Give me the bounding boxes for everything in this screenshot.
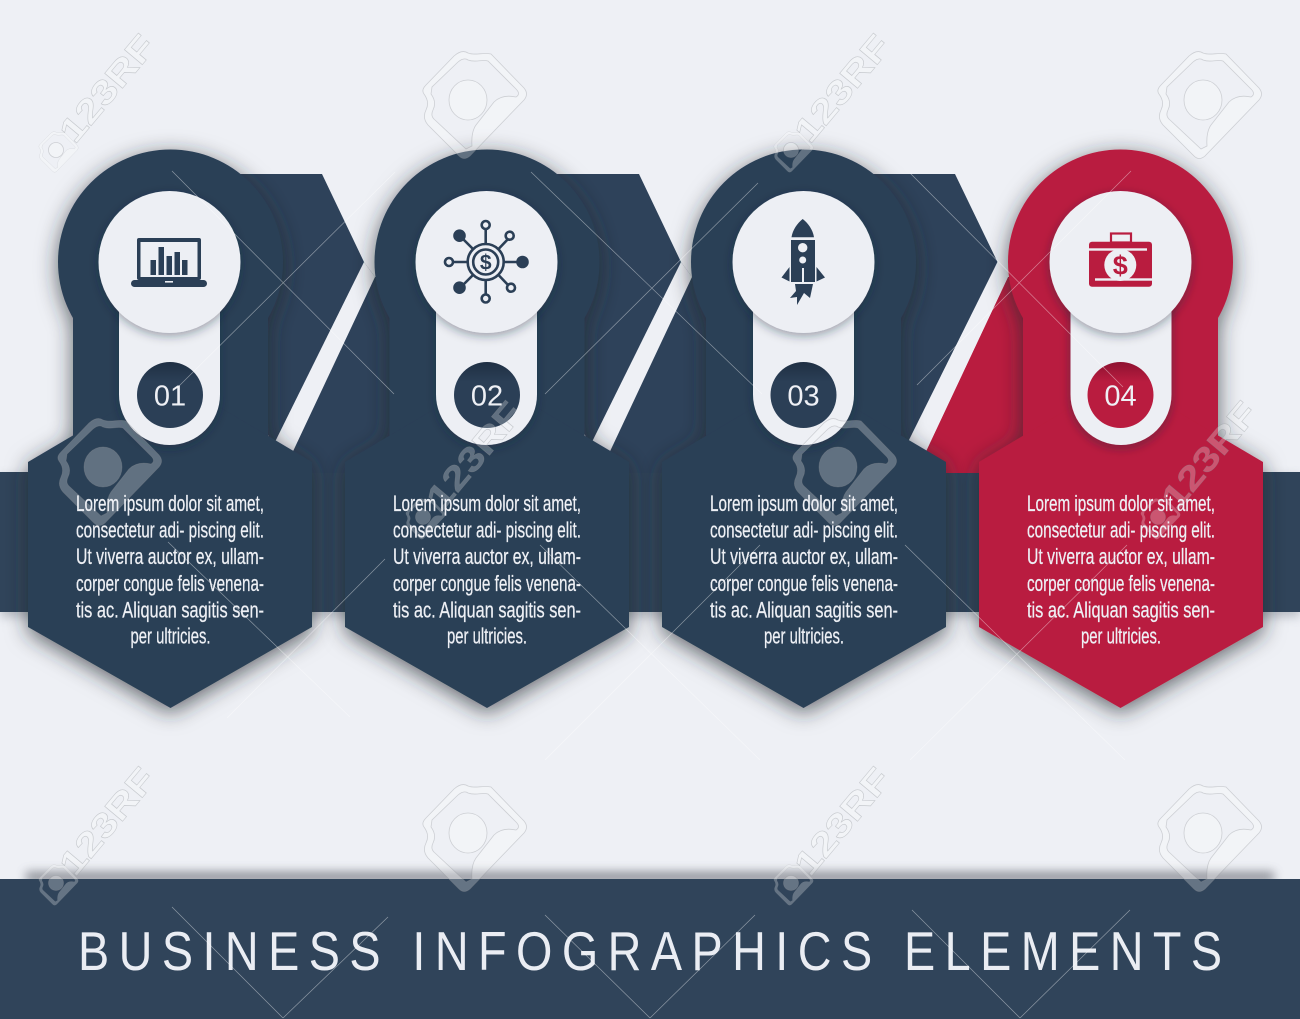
- step 1 description: Lorem ipsum dolor sit amet,: [76, 491, 264, 516]
- step 3 description: [710, 491, 898, 648]
- step 3 description: per ultricies.: [764, 624, 844, 648]
- step 2 silhouette: [345, 150, 629, 708]
- step 4 description: Ut viverra auctor ex, ullam-: [1027, 544, 1215, 569]
- step 2 pill: [436, 262, 537, 445]
- step 3 description: tis ac. Aliquan sagitis sen-: [710, 598, 898, 623]
- title band: [0, 872, 1300, 1019]
- step 2 description: per ultricies.: [447, 624, 527, 648]
- step 3 description: Ut viverra auctor ex, ullam-: [710, 544, 898, 569]
- step 2 description: Lorem ipsum dolor sit amet,: [393, 491, 581, 516]
- step 1 description: corper congue felis venena-: [76, 571, 264, 596]
- step 4 description: corper congue felis venena-: [1027, 571, 1215, 596]
- step 1 silhouette: [28, 150, 312, 708]
- step 4 icon circle: [1050, 191, 1192, 333]
- step 4 number badge: 04: [1104, 380, 1137, 412]
- step 3 silhouette: [662, 150, 946, 708]
- arrow connector 3 with red segment: [873, 174, 1040, 473]
- watermark diagonal hairlines: [168, 171, 1131, 1018]
- icon: briefcase with dollar: [1089, 234, 1152, 287]
- step 3 card: [662, 150, 946, 708]
- watermark stamps: 123RF: [1154, 395, 1265, 517]
- step 3 description: Lorem ipsum dolor sit amet,: [710, 491, 898, 516]
- step 2 number badge: 02: [471, 380, 503, 412]
- icon: dollar network: $: [480, 252, 492, 274]
- arrow connector 1: [240, 174, 400, 473]
- step 3 description: consectetur adi- piscing elit.: [710, 518, 898, 543]
- step 1 description: per ultricies.: [130, 624, 210, 648]
- step 4 pill: [1070, 262, 1172, 445]
- step 1 number badge: 01: [154, 380, 186, 412]
- step 2 card: [345, 150, 629, 708]
- horizontal ribbon behind the cards: [0, 472, 1300, 617]
- step 1 number badge: [137, 362, 203, 428]
- step 3 description: corper congue felis venena-: [710, 571, 898, 596]
- step 1 icon circle: [98, 191, 240, 333]
- title: BUSINESS INFOGRAPHICS ELEMENTS: [78, 920, 1222, 982]
- watermark stamps: 123RF: [787, 28, 898, 150]
- step 3 pill: [753, 262, 854, 445]
- step 2 number badge: [454, 362, 520, 428]
- step 4 number badge: [1088, 362, 1154, 428]
- watermark stamps: 123RF: [787, 761, 898, 883]
- step 2 description: [393, 491, 581, 648]
- step 3 number badge: [770, 362, 836, 428]
- step 1 pill: [119, 262, 220, 445]
- step 1 card: [28, 150, 312, 708]
- step 2 description: consectetur adi- piscing elit.: [393, 518, 581, 543]
- icon: laptop with bar chart: [131, 238, 207, 287]
- watermark stamps: 123RF: [419, 395, 530, 517]
- step 2 description: Ut viverra auctor ex, ullam-: [393, 544, 581, 569]
- step 4 description: Lorem ipsum dolor sit amet,: [1027, 491, 1215, 516]
- icon: dollar network: [445, 221, 528, 302]
- step 1 description: tis ac. Aliquan sagitis sen-: [76, 598, 264, 623]
- step 2 icon circle: [416, 191, 558, 333]
- step 2 description: tis ac. Aliquan sagitis sen-: [393, 598, 581, 623]
- step 3 icon circle: [732, 191, 874, 333]
- step 4 description: [1027, 491, 1215, 648]
- step 4 description: tis ac. Aliquan sagitis sen-: [1027, 598, 1215, 623]
- step 1 description: consectetur adi- piscing elit.: [76, 518, 264, 543]
- watermark stamps: 123RF: [52, 761, 163, 883]
- step 4 description: consectetur adi- piscing elit.: [1027, 518, 1215, 543]
- icon: rocket: [782, 219, 825, 305]
- watermark stamps: 123RF: [52, 28, 163, 150]
- step 4 card: [979, 150, 1263, 708]
- step 4 description: per ultricies.: [1081, 624, 1161, 648]
- step 1 description: Ut viverra auctor ex, ullam-: [76, 544, 264, 569]
- step 1 description: [76, 491, 264, 648]
- arrow connector 2: [557, 174, 717, 473]
- icon: briefcase with dollar: $: [1113, 250, 1128, 280]
- step 4 silhouette: [979, 150, 1263, 708]
- step 2 description: corper congue felis venena-: [393, 571, 581, 596]
- step 3 number badge: 03: [787, 380, 820, 412]
